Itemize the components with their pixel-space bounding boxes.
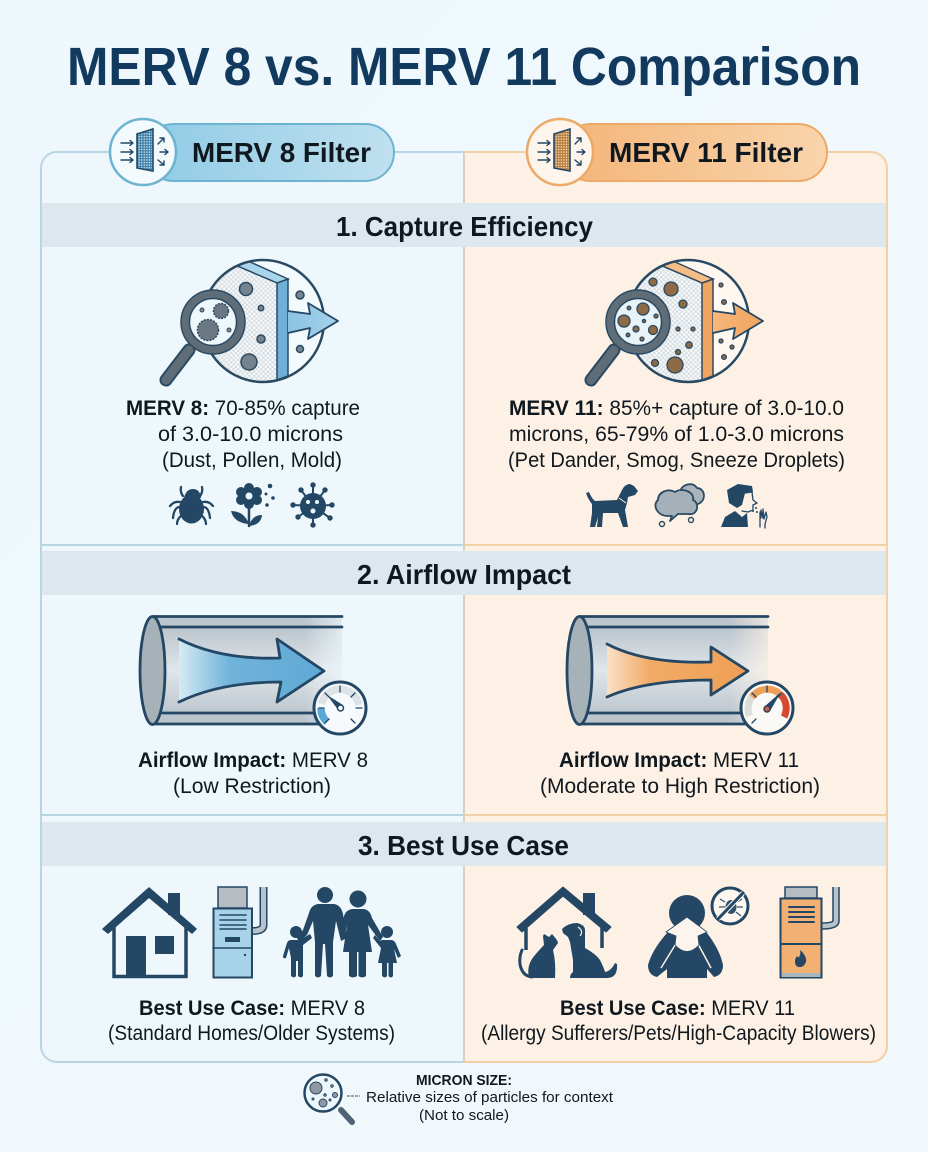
text: MERV 8 capture efficiency: [126, 396, 360, 472]
icon: micron magnifier: [304, 1074, 352, 1122]
header pill: MERV 11 filter: [527, 119, 827, 185]
icon: filter with airflow: [538, 129, 585, 171]
text: MERV 11 best use: [481, 996, 876, 1045]
comparison panel: [41, 152, 887, 1062]
text: MERV 8 best use: (Standard Homes/Older Systems): [108, 1021, 395, 1045]
icon: dog: [562, 923, 617, 978]
icon: gauge high: [741, 682, 793, 734]
text: MERV 11 best use: (Allergy Sufferers/Pets/High-Capacity Blowers): [481, 1021, 876, 1045]
header pill: MERV 8 filter: MERV 8 Filter: [192, 137, 371, 168]
text: MERV 11 capture efficiency: [508, 396, 845, 472]
section band: airflow impact: 2. Airflow Impact: [357, 559, 571, 590]
text: MERV 11 capture efficiency: (Pet Dander, Smog, Sneeze Droplets): [508, 448, 845, 472]
icon: magnifier: [166, 290, 245, 380]
icon: smog cloud: [655, 484, 704, 526]
text: MERV 8 capture efficiency: of 3.0-10.0 microns: [158, 422, 343, 446]
text: MERV 11 airflow: Airflow Impact: MERV 11: [559, 748, 799, 772]
icon: furnace orange: [780, 887, 836, 978]
icon: gauge low: [314, 682, 366, 734]
text: MERV 8 airflow: (Low Restriction): [173, 774, 331, 798]
illustration: MERV 11 filter under magnifier: [591, 258, 763, 385]
arrow: airflow: [179, 639, 324, 702]
illustration: MERV 11 duct with arrow: [567, 616, 793, 734]
arrow: airflow out: [713, 303, 763, 339]
icon: dog: [586, 484, 638, 527]
footnote: micron size: [347, 1072, 614, 1124]
text: MERV 8 airflow: [138, 748, 368, 798]
text: MERV 8 capture efficiency: (Dust, Pollen, Mold): [162, 448, 342, 472]
illustration: MERV 8 duct with arrow: [140, 616, 366, 734]
footnote: micron size: Relative sizes of particles for context: [366, 1089, 614, 1106]
icon: cat: [528, 934, 558, 978]
icon: allergy sufferer: [648, 895, 723, 978]
footnote: micron size: (Not to scale): [419, 1107, 509, 1124]
arrow: airflow out: [288, 303, 338, 339]
section band: airflow impact: [42, 551, 886, 595]
icon: furnace blue: [213, 887, 264, 978]
text: MERV 11 capture efficiency: MERV 11: 85%+ capture of 3.0-10.0: [509, 396, 844, 420]
icon: house with pets: [517, 887, 617, 978]
icon: dust mite: [170, 487, 213, 524]
section band: best use case: 3. Best Use Case: [358, 830, 569, 861]
icon: magnifier: [591, 290, 670, 380]
text: MERV 11 airflow: (Moderate to High Restriction): [540, 774, 820, 798]
arrow: airflow: [607, 644, 748, 697]
icon: pollen flower: [231, 483, 275, 526]
text: MERV 8 best use: Best Use Case: MERV 8: [139, 996, 365, 1020]
icon: house: [103, 888, 196, 977]
header pill: MERV 8 filter: [110, 119, 394, 185]
text: MERV 11 best use: Best Use Case: MERV 11: [560, 996, 795, 1020]
text: MERV 11 airflow: [540, 748, 820, 798]
icon: no dust mites: [712, 888, 748, 924]
section band: best use case: [42, 822, 886, 866]
icon: person sneezing: [721, 484, 767, 528]
footnote: micron size: MICRON SIZE:: [416, 1072, 512, 1089]
illustration: MERV 8 filter under magnifier: [166, 258, 338, 385]
header pill: MERV 11 filter: MERV 11 Filter: [609, 137, 803, 168]
section band: capture efficiency: 1. Capture Efficiency: [336, 211, 593, 242]
icon: filter with airflow: [121, 129, 168, 171]
title: MERV 8 vs. MERV 11 Comparison: [67, 37, 861, 97]
icon: family: [283, 887, 401, 978]
text: MERV 11 capture efficiency: microns, 65-79% of 1.0-3.0 microns: [509, 422, 844, 446]
icon: mold spore: [290, 482, 335, 528]
section band: capture efficiency: [42, 203, 886, 247]
text: MERV 8 airflow: Airflow Impact: MERV 8: [138, 748, 368, 772]
text: MERV 8 best use: [108, 996, 395, 1045]
text: MERV 8 capture efficiency: MERV 8: 70-85% capture: [126, 396, 360, 420]
